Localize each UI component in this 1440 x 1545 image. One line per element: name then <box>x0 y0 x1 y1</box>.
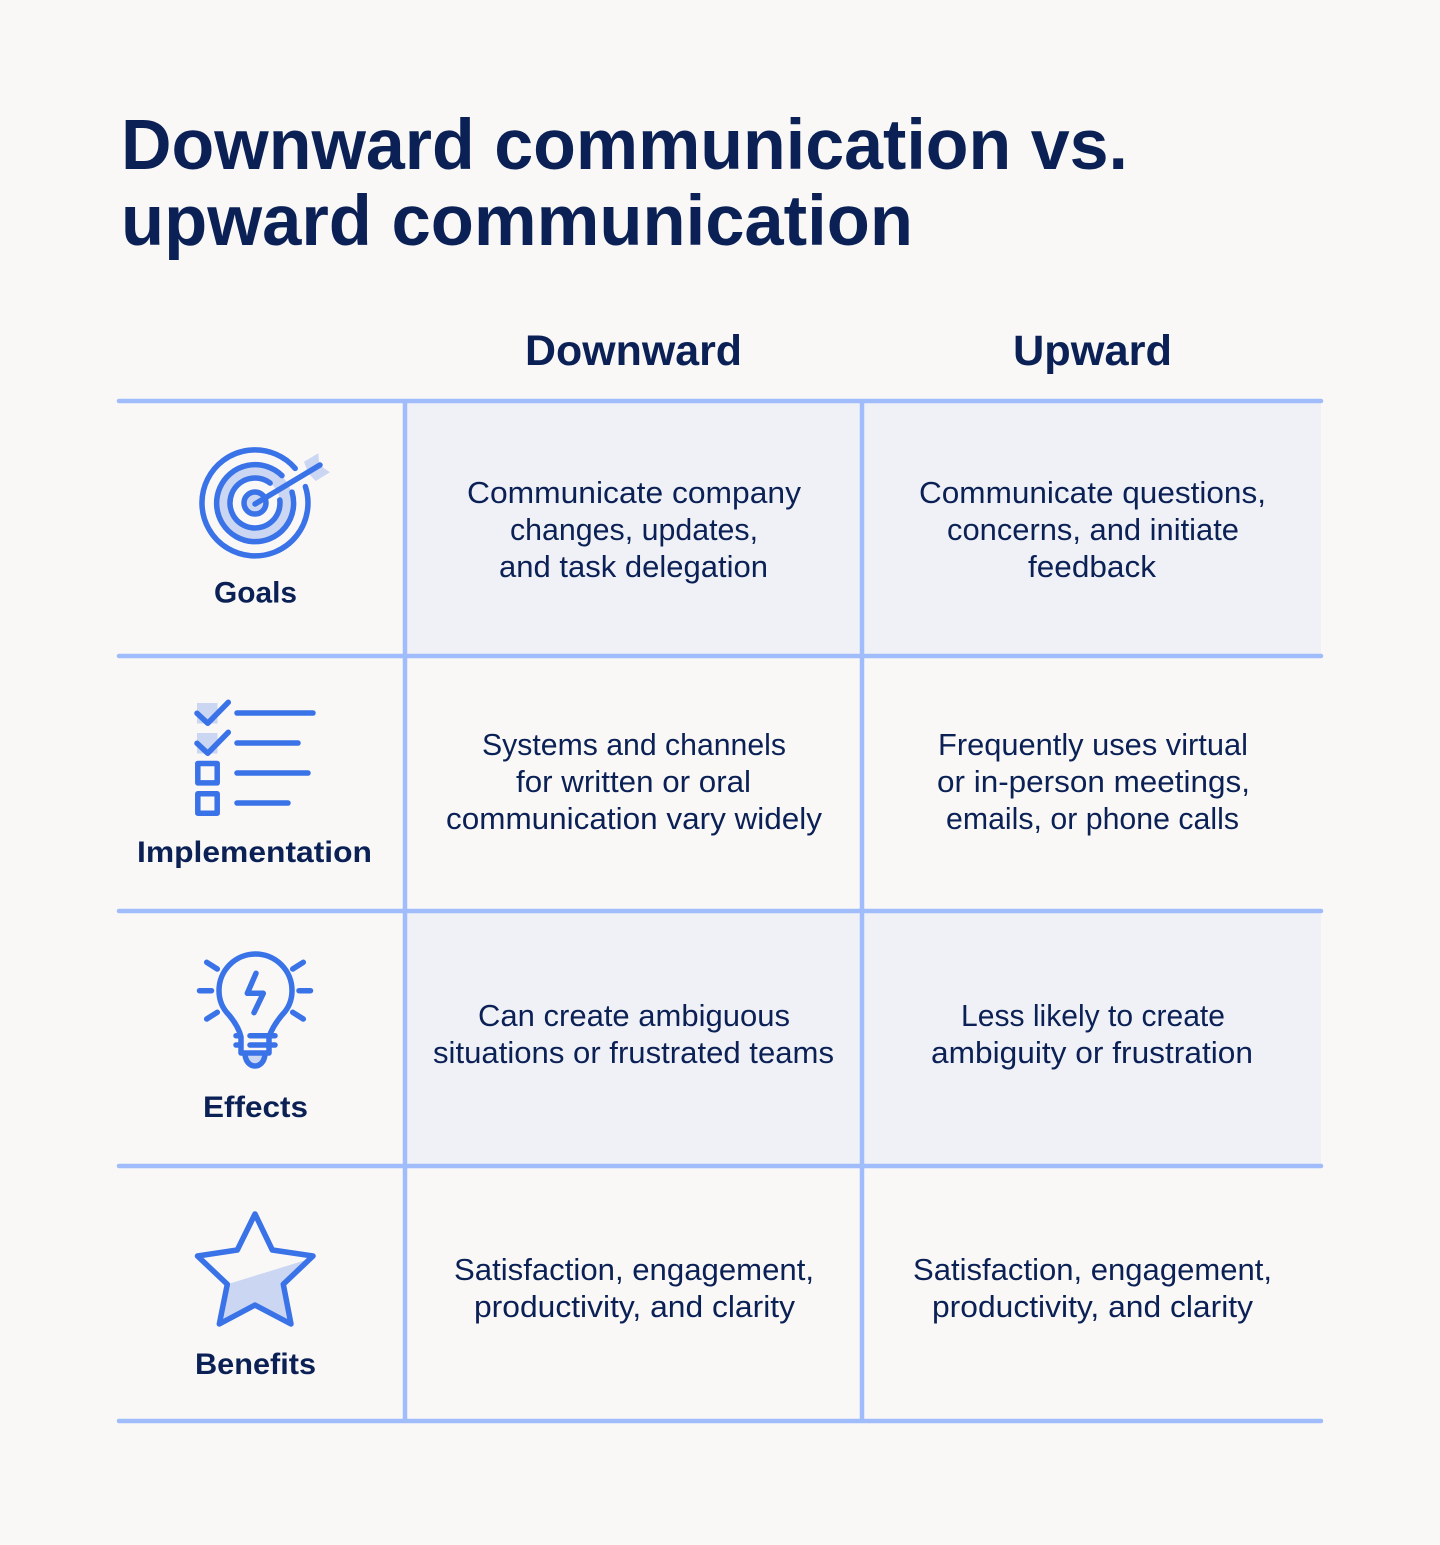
cell: Implementation, Downward: communication vary widely <box>446 801 822 836</box>
cell: Implementation, Downward: Systems and channels <box>482 727 786 762</box>
cell: Effects, Downward: Can create ambiguous <box>478 998 790 1033</box>
cell: Benefits, Downward: Satisfaction, engagement, <box>454 1252 814 1287</box>
cell: Goals, Upward <box>919 475 1266 584</box>
title <box>121 106 1128 261</box>
icon: star <box>198 1214 313 1324</box>
label: Goals: Goals <box>214 576 297 610</box>
cell: Goals, Upward: Communicate questions, <box>919 475 1266 510</box>
cell: Effects, Upward: Less likely to create <box>961 998 1225 1033</box>
cell: Goals, Downward: changes, updates, <box>510 512 758 547</box>
column heading: Downward: Downward <box>525 327 742 375</box>
cell: Implementation, Downward: for written or oral <box>516 764 751 799</box>
label: Effects: Effects <box>203 1091 308 1124</box>
cell: Benefits, Downward: productivity, and clarity <box>474 1289 796 1324</box>
cell: Effects, Upward: ambiguity or frustration <box>931 1035 1253 1070</box>
cell: Implementation, Upward <box>937 727 1250 836</box>
cell: Benefits, Upward: Satisfaction, engagement, <box>913 1252 1272 1287</box>
cell: Goals, Downward: Communicate company <box>467 475 802 510</box>
cell: Effects, Downward <box>433 998 834 1070</box>
label: Implementation: Implementation <box>137 836 372 869</box>
title: upward communication <box>121 182 913 261</box>
icon: checklist <box>197 702 313 813</box>
cell: Effects, Downward: situations or frustrated teams <box>433 1035 834 1070</box>
cell: Goals, Downward: and task delegation <box>499 549 768 584</box>
row header: Implementation <box>137 702 372 869</box>
row header: Goals <box>202 450 330 610</box>
cell: Benefits, Downward <box>454 1252 814 1324</box>
cell: Implementation, Upward: or in-person meetings, <box>937 764 1250 799</box>
shaded row: Effects <box>405 911 1321 1166</box>
cell: Goals, Upward: concerns, and initiate <box>947 512 1239 547</box>
cell: Benefits, Upward: productivity, and clarity <box>932 1289 1254 1324</box>
icon: target with arrow <box>202 450 330 556</box>
icon: light bulb <box>200 954 310 1066</box>
cell: Implementation, Downward <box>446 727 822 836</box>
cell: Goals, Upward: feedback <box>1028 549 1156 584</box>
column heading: Upward: Upward <box>1013 327 1172 375</box>
row header: Benefits <box>195 1214 316 1381</box>
cell: Implementation, Upward: Frequently uses virtual <box>938 727 1248 762</box>
cell: Effects, Upward <box>931 998 1253 1070</box>
cell: Goals, Downward <box>467 475 802 584</box>
shaded row: Goals <box>405 401 1321 656</box>
cell: Benefits, Upward <box>913 1252 1272 1324</box>
title: Downward communication vs. <box>121 106 1128 185</box>
cell: Implementation, Upward: emails, or phone calls <box>946 801 1239 836</box>
row header: Effects <box>200 954 310 1124</box>
label: Benefits: Benefits <box>195 1348 316 1381</box>
